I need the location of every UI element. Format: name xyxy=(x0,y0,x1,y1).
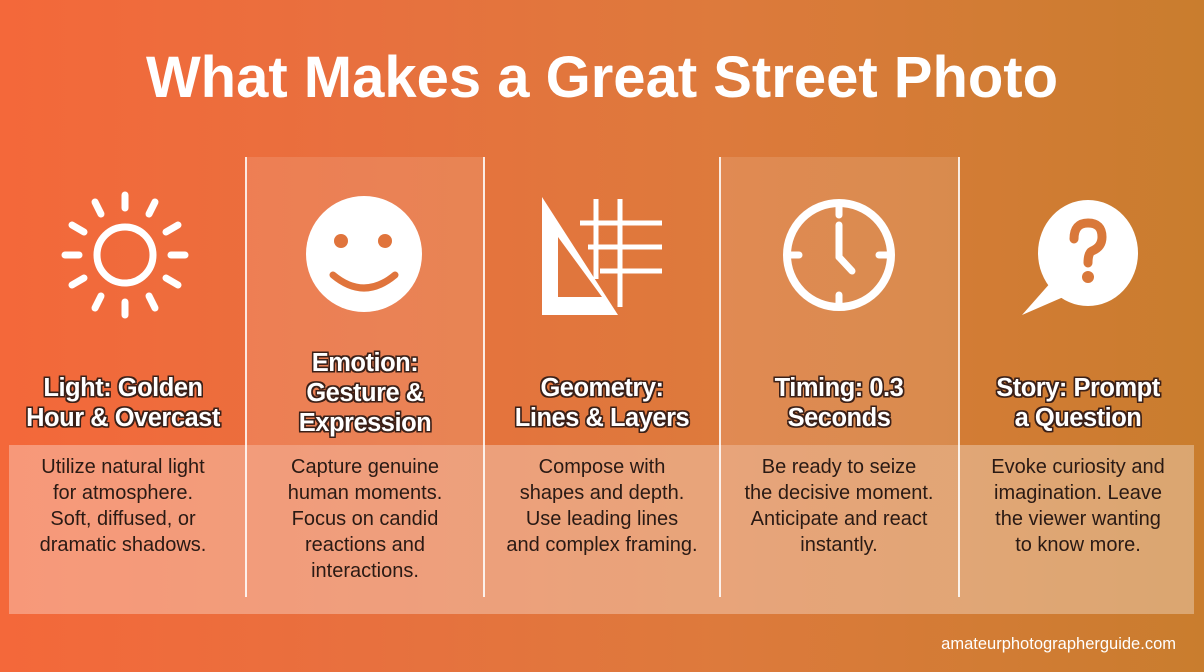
heading xyxy=(514,374,690,433)
text: and complex framing. xyxy=(506,534,698,556)
text: the viewer wanting xyxy=(995,508,1161,530)
title: What Makes a Great Street Photo xyxy=(146,45,1058,110)
heading xyxy=(996,374,1162,432)
text xyxy=(40,456,206,556)
heading: a Question xyxy=(1015,404,1141,432)
text: instantly. xyxy=(800,534,878,556)
panel: geometry xyxy=(506,197,698,556)
heading: Gesture & xyxy=(306,379,424,407)
heading: Timing: 0.3 xyxy=(775,374,903,402)
panel: emotion xyxy=(288,196,442,582)
panel: story xyxy=(991,200,1165,556)
heading: Hour & Overcast xyxy=(26,404,220,432)
text: shapes and depth. xyxy=(520,482,684,504)
text: Focus on candid xyxy=(292,508,438,530)
icon: sun xyxy=(62,192,188,318)
text: Evoke curiosity and xyxy=(991,456,1165,478)
description band xyxy=(9,445,1194,614)
heading: Seconds xyxy=(788,404,890,432)
heading: Emotion: xyxy=(312,349,418,377)
icon: question bubble xyxy=(1022,200,1138,315)
heading xyxy=(298,349,432,438)
text: Compose with xyxy=(539,456,665,478)
heading xyxy=(773,374,904,432)
text: Soft, diffused, or xyxy=(50,508,196,530)
icon: set square and grid xyxy=(542,197,662,315)
text: the decisive moment. xyxy=(744,482,933,504)
text: imagination. Leave xyxy=(994,482,1162,504)
icon: smiley xyxy=(306,196,422,312)
footer url: amateurphotographerguide.com xyxy=(941,635,1176,653)
text: Anticipate and react xyxy=(751,508,927,530)
text: dramatic shadows. xyxy=(40,534,206,556)
icon: clock xyxy=(783,199,895,311)
heading: Geometry: xyxy=(540,374,664,402)
text xyxy=(991,456,1165,556)
text: Utilize natural light xyxy=(41,456,205,478)
text xyxy=(744,456,933,556)
panel: timing xyxy=(744,199,933,556)
heading: Light: Golden xyxy=(43,374,203,402)
text xyxy=(288,456,442,582)
text: Capture genuine xyxy=(291,456,439,478)
panel: light xyxy=(26,192,222,556)
text: interactions. xyxy=(311,560,419,582)
text: human moments. xyxy=(288,482,442,504)
text: Be ready to seize xyxy=(762,456,916,478)
text xyxy=(506,456,698,556)
heading: Expression xyxy=(299,409,431,437)
text: for atmosphere. xyxy=(53,482,193,504)
heading: Lines & Layers xyxy=(515,404,689,432)
text: to know more. xyxy=(1015,534,1141,556)
heading: Story: Prompt xyxy=(996,374,1160,402)
text: reactions and xyxy=(305,534,425,556)
text: Use leading lines xyxy=(526,508,678,530)
heading xyxy=(26,374,222,432)
